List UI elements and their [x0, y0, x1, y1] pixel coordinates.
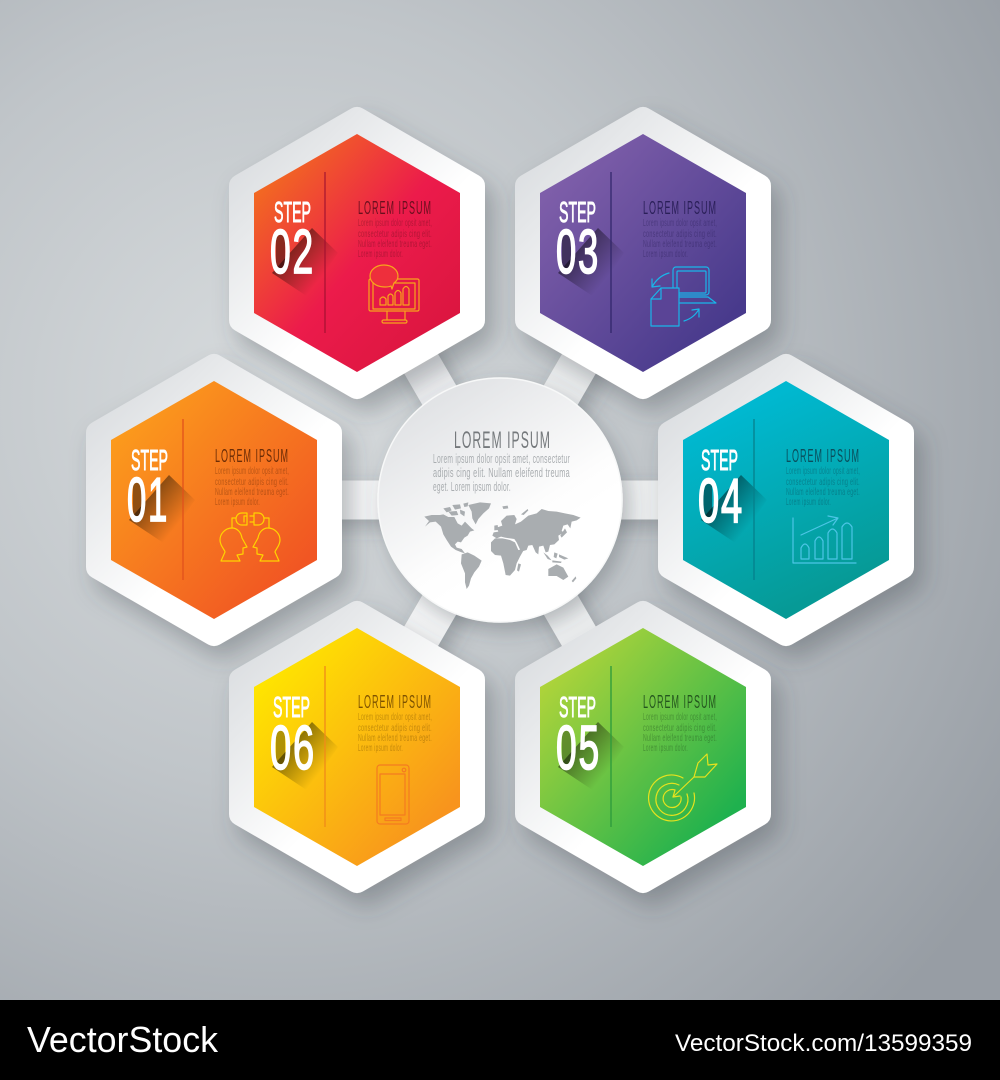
- panel: step 06: LOREM IPSUM: [358, 692, 432, 712]
- panel: step 02: LOREM IPSUM: [358, 198, 432, 218]
- panel: step 06: Lorem ipsum dolor opsit amet,: [358, 711, 432, 723]
- panel: step 03: STEP: [559, 197, 596, 229]
- icon: monitor with chart and speech bubble: [369, 265, 419, 323]
- panel: centre circle: [378, 378, 622, 622]
- panel: step 01: LOREM IPSUM: [215, 446, 289, 466]
- panel: step 05: consectetur adipis cing elit.: [643, 722, 717, 734]
- panel: step 01: 01: [127, 466, 169, 535]
- text block: centre: eget. Lorem ipsum dolor.: [433, 479, 511, 494]
- panel: step 05: [527, 613, 759, 881]
- panel: step 03: Nullam eleifend treuma eget.: [643, 238, 717, 250]
- panel: step 03: Lorem ipsum dolor opsit amet,: [643, 217, 717, 229]
- text block: centre: adipis cing elit. Nullam eleifend treuma: [433, 465, 570, 480]
- panel: step 02: 02: [270, 218, 315, 287]
- panel: step 01: STEP: [131, 445, 168, 477]
- panel: step 02: Lorem ipsum dolor.: [358, 248, 403, 260]
- panel: step 02: Lorem ipsum dolor opsit amet,: [358, 217, 432, 229]
- panel: step 04: Lorem ipsum dolor.: [786, 496, 831, 508]
- panel: step 02: STEP: [274, 197, 311, 229]
- panel: step 05: LOREM IPSUM: [643, 692, 717, 712]
- connectors between centre and hexagons: [214, 253, 786, 747]
- icon: two heads with plug: [220, 513, 280, 561]
- panel: step 02: Nullam eleifend treuma eget.: [358, 238, 432, 250]
- panel: step 04: STEP: [701, 445, 738, 477]
- world map: [424, 502, 581, 589]
- panel: step 06: Nullam eleifend treuma eget.: [358, 732, 432, 744]
- icon: rising bar chart: [793, 516, 856, 563]
- panel: step 01: Lorem ipsum dolor opsit amet,: [215, 465, 289, 477]
- footer brand: VectorStock: [27, 1019, 219, 1060]
- panel: step 06: consectetur adipis cing elit.: [358, 722, 432, 734]
- text block: centre: Lorem ipsum dolor opsit amet, consectetur: [433, 451, 570, 466]
- panel: step 04: 04: [698, 467, 744, 536]
- icon: target with arrow: [649, 754, 717, 821]
- panel: step 01: Nullam eleifend treuma eget.: [215, 486, 289, 498]
- panel: step 05: Nullam eleifend treuma eget.: [643, 732, 717, 744]
- footer image id: VectorStock.com/13599359: [675, 1030, 972, 1057]
- panel: step 01: [98, 366, 330, 634]
- icon: smartphone: [377, 765, 409, 824]
- panel: step 06: Lorem ipsum dolor.: [358, 742, 403, 754]
- panel: step 04: Nullam eleifend treuma eget.: [786, 486, 860, 498]
- text block: centre: [433, 451, 570, 494]
- panel: step 03: consectetur adipis cing elit.: [643, 228, 717, 240]
- panel: step 05: STEP: [559, 692, 596, 724]
- icon: document and laptop transfer: [651, 267, 716, 326]
- panel: step 02: consectetur adipis cing elit.: [358, 228, 432, 240]
- panel: step 03: 03: [556, 218, 600, 287]
- footer bar: [0, 1000, 1000, 1080]
- panel: step 06: [241, 613, 473, 881]
- panel: step 06: STEP: [273, 692, 310, 724]
- panel: step 03: Lorem ipsum dolor.: [643, 248, 688, 260]
- panel: step 01: consectetur adipis cing elit.: [215, 476, 289, 488]
- panel: step 05: Lorem ipsum dolor.: [643, 742, 688, 754]
- panel: step 06: 06: [270, 714, 316, 783]
- panel: step 04: consectetur adipis cing elit.: [786, 476, 860, 488]
- panel: step 05: Lorem ipsum dolor opsit amet,: [643, 711, 717, 723]
- panel: step 03: [527, 119, 759, 387]
- panel: step 04: Lorem ipsum dolor opsit amet,: [786, 465, 860, 477]
- panel: step 02: [241, 119, 473, 387]
- panel: step 03: LOREM IPSUM: [643, 198, 717, 218]
- panel: step 04: [670, 366, 902, 634]
- heading: centre: LOREM IPSUM: [454, 427, 551, 454]
- panel: step 05: 05: [556, 714, 601, 783]
- panel: step 04: LOREM IPSUM: [786, 446, 860, 466]
- panel: step 01: Lorem ipsum dolor.: [215, 496, 260, 508]
